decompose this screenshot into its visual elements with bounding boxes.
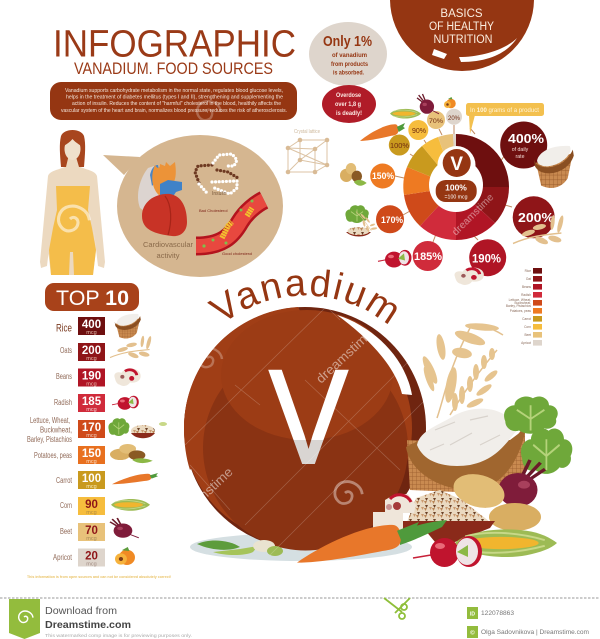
row: oats: mcg	[86, 356, 97, 362]
icon: carrot small	[360, 123, 405, 141]
row: beet	[60, 518, 139, 542]
legend: Beans	[522, 285, 531, 289]
heading: Vanadium arc: Vanadium	[207, 270, 397, 324]
row: oats: 200	[82, 345, 101, 357]
icon: crystal lattice: Crystal lattice	[294, 129, 320, 135]
row: corn: 90	[85, 499, 98, 511]
center: V symbol	[443, 149, 471, 177]
icon: woman figure	[40, 130, 105, 275]
watermark lines	[185, 305, 430, 555]
row: lettuce wheat buckwheat: Lettuce, Wheat,	[30, 416, 70, 425]
row: lettuce wheat buckwheat: mcg	[86, 433, 97, 439]
panel: basics of healthy nutrition: OF HEALTHY	[429, 21, 494, 33]
row: oats: Oats	[60, 346, 72, 355]
icon: woven basket	[407, 425, 525, 495]
row: potatoes peas: mcg	[86, 459, 97, 465]
panel: basics of healthy nutrition	[390, 0, 534, 71]
row: lettuce wheat buckwheat	[27, 416, 167, 444]
row: radish: mcg	[86, 407, 97, 413]
icon: buckwheat	[407, 490, 490, 522]
panel: speech bubble of body effects	[103, 135, 283, 277]
bubble: 100%	[389, 134, 410, 156]
icon: blood vessel	[196, 200, 264, 248]
row: beans: Beans	[56, 372, 72, 381]
chart: donut of vanadium sources	[395, 125, 512, 242]
panel: basics of healthy nutrition: BASICS	[440, 8, 483, 20]
icon: rice basket	[534, 146, 574, 188]
callout: in 100 grams	[466, 103, 544, 134]
bubble: 150%: 150%	[372, 171, 394, 181]
watermark: spirals and names: dreamstime	[450, 192, 497, 238]
logo badge	[9, 599, 40, 639]
row: beans	[56, 368, 141, 388]
row: radish	[54, 394, 139, 413]
row: apricot	[53, 547, 135, 568]
icon: potatoes	[450, 469, 541, 531]
heading: top 10	[45, 283, 139, 311]
download text	[45, 606, 192, 638]
panel: description: helps in the treatment of diabetes mellitus (types I and II), strengthening and supplementing the	[66, 95, 283, 101]
row: beans: mcg	[86, 382, 97, 388]
legend: Buckwheat,	[515, 301, 531, 305]
image id: 122078863	[481, 610, 514, 617]
bubble: 400%: 400%	[508, 131, 544, 146]
bubble: 200%: 200%	[518, 210, 554, 225]
bubble: 400%: of daily	[512, 147, 529, 153]
row: rice	[56, 314, 141, 338]
panel: description: action of insulin. Reduces the content of "harmful" cholesterol in the blood, healthily affects the	[72, 101, 281, 107]
icon: large sphere with V	[184, 307, 426, 550]
image author	[467, 626, 589, 638]
callout: only 1% absorbed: from products	[331, 61, 368, 68]
subtitle: VANADIUM. FOOD SOURCES	[74, 60, 273, 78]
watermark: spirals and names: dreamstime	[173, 464, 236, 524]
icon: large sphere with V: V	[269, 343, 348, 492]
bubble: 190%	[469, 239, 506, 276]
bubble: 185%: 185%	[414, 251, 442, 263]
row: beans: 190	[82, 370, 101, 382]
chart: donut of vanadium sources: 100%	[445, 182, 467, 192]
callout: only 1% absorbed: of vanadium	[332, 52, 367, 59]
row: beet: 70	[85, 525, 98, 537]
callout: overdose	[322, 85, 376, 123]
bubble: 190%: 190%	[472, 254, 501, 266]
row: beet: Beet	[60, 527, 73, 536]
row: beet: mcg	[86, 536, 97, 542]
panel: description	[50, 82, 297, 120]
label: insulin: Insulin	[212, 191, 227, 197]
legend: Radish	[521, 293, 531, 297]
row: lettuce wheat buckwheat: Barley, Pistachios	[27, 435, 72, 444]
callout: overdose: over 1,8 g	[335, 101, 361, 108]
icon: heart	[138, 162, 187, 236]
icon: lettuce	[504, 396, 572, 474]
row: radish: Radish	[54, 398, 72, 407]
image author: Olga Sadovnikova | Dreamstime.com	[481, 629, 589, 636]
labels: cholesterol: Good cholesterol	[222, 251, 252, 256]
bubble: 100%: 100%	[390, 141, 409, 150]
legend: Oat	[526, 277, 531, 281]
bubble: 400%: rate	[516, 154, 525, 160]
legend: Lettuce, Wheat,	[509, 298, 531, 302]
icon: beans	[455, 268, 484, 285]
legend: Carrot	[522, 317, 531, 321]
row: potatoes peas: Potatoes, peas	[34, 451, 72, 460]
title: INFOGRAPHIC	[53, 24, 296, 66]
icon: peas and pistachios	[197, 540, 283, 556]
legend: Corn	[524, 325, 531, 329]
center: 100 percent	[436, 180, 477, 202]
label: cardiovascular activity: activity	[157, 251, 180, 260]
labels: cholesterol	[199, 208, 252, 256]
callout: only 1% absorbed: Only 1%	[323, 33, 372, 50]
row: lettuce wheat buckwheat: Buckwheat,	[40, 426, 72, 434]
bubble: 90%: 90%	[412, 128, 426, 135]
bubble: 90%	[408, 120, 428, 140]
bubble: 70%: 70%	[429, 118, 443, 125]
image id	[467, 607, 514, 619]
row: carrot: Carrot	[56, 476, 73, 485]
row: carrot: 100	[82, 473, 101, 485]
icon: scissors	[384, 598, 410, 619]
watermark: spirals and names	[173, 101, 497, 524]
panel: description: Vanadium supports carbohydrate metabolism in the normal state, regulates blood glucose levels,	[65, 88, 283, 94]
callout: only 1% absorbed: is absorbed.	[333, 70, 364, 76]
row: corn: Corn	[60, 501, 72, 510]
bubble: 185%	[413, 241, 443, 271]
row: apricot: 20	[85, 550, 98, 562]
row: corn	[60, 497, 150, 516]
icon: radish	[378, 250, 412, 267]
heading: top 10: TOP 10	[56, 287, 129, 310]
chart: donut of vanadium sources: =100 mcg	[445, 194, 468, 200]
icon: corn small	[390, 109, 421, 119]
callout: in 100 grams: In 100 grams of a product	[470, 108, 539, 114]
icon: food plate	[190, 533, 412, 561]
bubble: 70%	[427, 111, 445, 129]
panel: description: vascular system of the heart and brain, normalizes blood pressure, reduces the risk of atherosclerosis.	[61, 108, 287, 114]
callout: only 1% absorbed	[309, 22, 387, 86]
panel: basics of healthy nutrition: NUTRITION	[434, 34, 492, 46]
icon: red bowl	[402, 521, 495, 548]
icon: large carrot	[297, 522, 419, 563]
icon: insulin chain	[195, 154, 238, 194]
callout: overdose: is deadly!	[336, 110, 362, 117]
legend: Potatoes, peas	[510, 309, 531, 313]
download text: This watermarked comp image is for previewing purposes only.	[45, 633, 192, 638]
callout: overdose: Overdose	[336, 92, 361, 99]
icon: potatoes and peas	[340, 163, 367, 186]
icon: beet	[485, 460, 545, 507]
legend	[506, 268, 542, 346]
bubble: 20%: 20%	[448, 116, 461, 122]
icon: large corn	[455, 529, 557, 557]
icon: apricot small	[444, 97, 456, 108]
legend: Barley, Pistachios	[506, 304, 531, 308]
icon: wheat	[513, 215, 565, 246]
icon: beans cluster	[373, 494, 416, 530]
connectors	[395, 125, 512, 242]
bubble: 20%	[446, 109, 462, 125]
legend: Apricot	[521, 341, 531, 345]
icon: oats and wheat	[420, 322, 503, 418]
icon: rice mound	[406, 409, 526, 490]
row: lettuce wheat buckwheat: 170	[82, 422, 101, 434]
legend: Beet	[524, 333, 531, 337]
bubble: 170%	[376, 205, 404, 233]
row: carrot	[56, 471, 158, 490]
row: carrot: mcg	[86, 484, 97, 490]
row: oats	[60, 335, 152, 362]
row: radish: 185	[82, 396, 102, 408]
bubble: 170%: 170%	[381, 215, 403, 225]
image id: ID	[470, 612, 475, 618]
row: apricot: mcg	[86, 562, 97, 568]
image author: ©	[470, 630, 475, 636]
legend: Rice	[525, 269, 531, 273]
chart: donut of vanadium sources: V	[450, 154, 463, 175]
icon: green pod	[400, 520, 447, 545]
row: potatoes peas: 150	[82, 448, 101, 460]
bubble: 400%	[500, 122, 547, 168]
download text: Download from	[45, 606, 117, 617]
watermark: spirals and names: dreamstime	[313, 326, 376, 386]
row: apricot: Apricot	[53, 553, 73, 562]
label: cardiovascular activity: Cardiovascular	[143, 240, 194, 249]
row: rice: Rice	[56, 322, 72, 334]
bubble: 150%	[370, 164, 395, 188]
row: corn: mcg	[86, 510, 97, 516]
bubble: 200%	[513, 196, 555, 238]
icon: crystal lattice	[286, 129, 329, 174]
download text: Dreamstime.com	[45, 620, 131, 631]
label: cardiovascular activity	[143, 240, 194, 260]
row: rice: mcg	[86, 330, 97, 336]
labels: cholesterol: Bad Cholesterol	[199, 208, 228, 213]
footer bar	[0, 598, 600, 639]
row: rice: 400	[82, 319, 101, 331]
icon: beet small	[417, 94, 439, 114]
icon: lettuce and grains	[345, 205, 378, 236]
icon: large radish	[413, 536, 482, 567]
footnote: This information is from open sources and can not be considered absolutely correct!	[27, 575, 171, 579]
row: potatoes peas	[34, 444, 153, 465]
